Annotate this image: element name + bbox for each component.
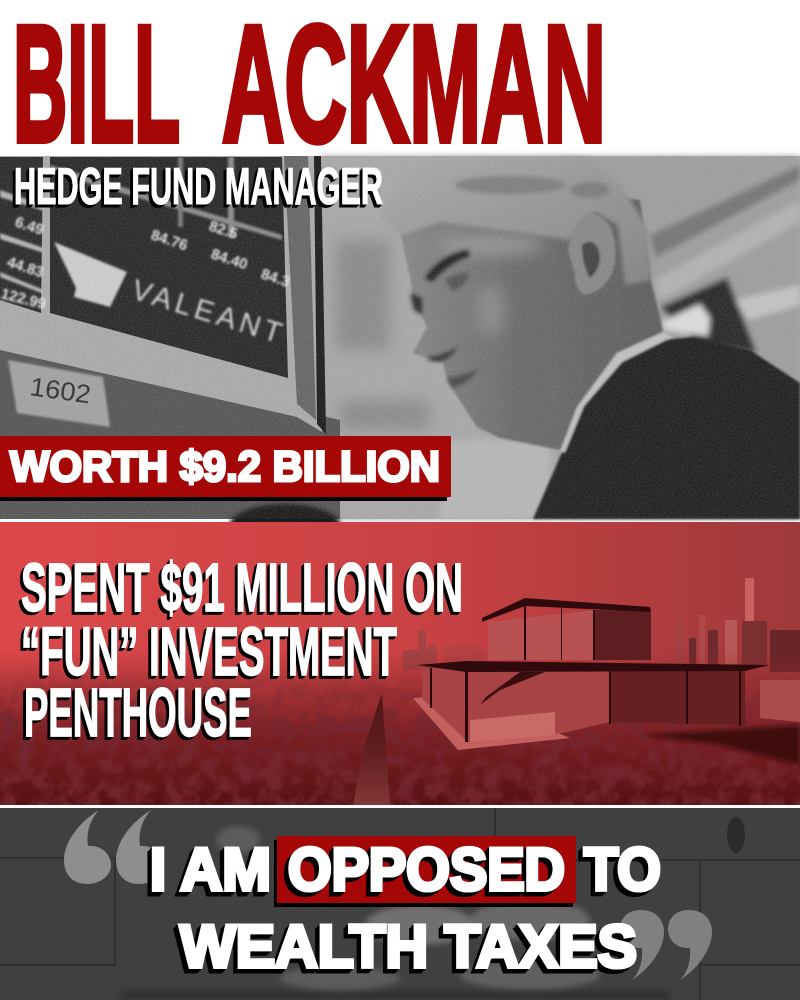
icon: opening quotation mark bbox=[64, 810, 163, 884]
house bbox=[413, 598, 770, 750]
wall behind the man bbox=[320, 156, 800, 520]
subtitle: hedge fund manager: HEDGE FUND MANAGER bbox=[14, 158, 383, 216]
hair shading bbox=[455, 176, 565, 194]
ticker numbers: 82.5 bbox=[207, 218, 240, 243]
film grain bbox=[0, 156, 800, 519]
sticker 1602 bbox=[8, 360, 110, 427]
ear bbox=[568, 214, 615, 295]
patterned wall reflections bbox=[335, 240, 430, 430]
neck and face bbox=[400, 185, 663, 450]
penthouse headline: PENTHOUSE bbox=[24, 674, 252, 751]
upper frame posts bbox=[524, 606, 595, 660]
panel: quote bbox=[0, 808, 800, 1000]
nose shadow bbox=[428, 346, 458, 361]
banner: net worth: WORTH $9.2 BILLION bbox=[10, 443, 440, 491]
hair bbox=[380, 157, 651, 285]
walkway bbox=[353, 693, 390, 805]
ticker numbers bbox=[0, 214, 292, 313]
ticker numbers: 122.99 bbox=[0, 285, 48, 313]
monitor screen bbox=[50, 157, 288, 378]
hedge right of terrace bbox=[640, 725, 800, 765]
quote text: TO bbox=[584, 836, 661, 903]
ticker numbers: 84.76 bbox=[149, 227, 190, 254]
ticker numbers: 84.3 bbox=[259, 266, 292, 291]
penthouse headline: SPENT $91 MILLION ON bbox=[21, 549, 463, 626]
title bbox=[13, 0, 606, 177]
quote text: I AM bbox=[150, 836, 271, 903]
ticker numbers: 84.40 bbox=[209, 246, 250, 273]
forehead and cheek light bbox=[435, 235, 545, 336]
mouth bbox=[447, 368, 480, 388]
deck slab bbox=[417, 661, 770, 672]
panel: portrait photo bbox=[0, 156, 800, 548]
highlight box bbox=[274, 836, 576, 907]
icon: closing quotation mark bbox=[620, 910, 712, 980]
roof bbox=[482, 598, 651, 622]
Valeant wordmark: VALEANT bbox=[128, 274, 286, 350]
quote text: OPPOSED bbox=[288, 836, 565, 903]
penthouse headline: “FUN” INVESTMENT bbox=[21, 613, 397, 690]
upper glass room bbox=[488, 610, 595, 660]
monitor bbox=[0, 156, 341, 548]
penthouse headline bbox=[21, 549, 463, 751]
man bbox=[0, 156, 800, 519]
skyline bbox=[403, 578, 800, 672]
eye bbox=[445, 273, 470, 291]
left ticker screen bbox=[0, 157, 43, 313]
dark head in foreground bbox=[229, 504, 341, 548]
building right bbox=[760, 680, 800, 722]
jacket bbox=[533, 337, 800, 519]
lower glass room bbox=[422, 668, 610, 742]
eyebrow bbox=[425, 250, 470, 282]
sticker 1602: 1602 bbox=[28, 371, 93, 409]
ticker numbers: 44.83 bbox=[5, 254, 46, 281]
collar bbox=[560, 332, 672, 452]
panel: penthouse bbox=[0, 522, 800, 805]
quote text bbox=[150, 836, 661, 980]
lower frame posts bbox=[430, 668, 741, 742]
Valeant logo mark bbox=[54, 242, 127, 307]
quote text: WEALTH TAXES bbox=[180, 913, 637, 980]
background photo bbox=[0, 808, 800, 1000]
lower terrace floor bbox=[413, 695, 570, 750]
ticker numbers: 6.49 bbox=[13, 214, 46, 239]
treeline bbox=[0, 650, 800, 805]
